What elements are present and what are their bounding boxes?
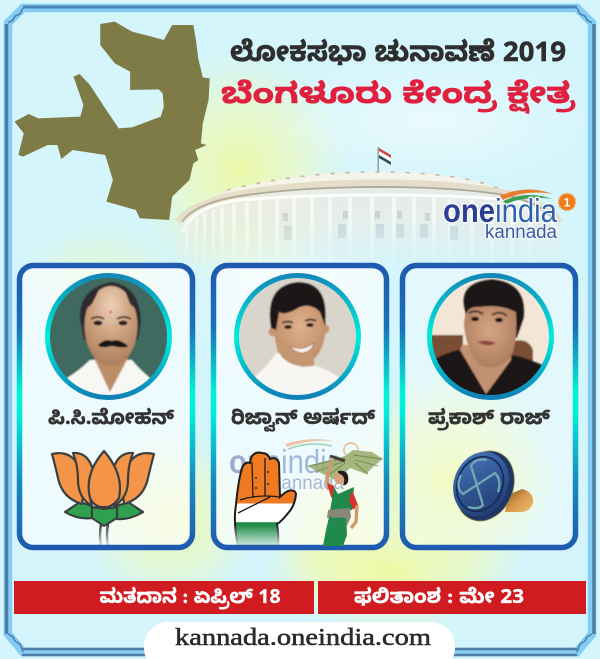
date bar: polling [14,581,314,614]
panel: candidate 2 [214,266,386,548]
portrait 3 [427,273,554,400]
panel: candidate 1 [20,266,192,548]
panel: candidate 3 [402,266,576,548]
parliament building [178,147,560,264]
name 2: ರಿಜ್ವಾನ್ ಅರ್ಷದ್ [231,407,375,435]
title [221,38,575,119]
logo: oneindia kannada [443,189,576,243]
website pill [144,622,455,659]
date bar: result: ಫಲಿತಾಂಶ : ಮೇ 23 [354,586,524,614]
icon: hand [235,453,296,546]
watermark logo: oneindia [229,443,344,480]
logo sub word: kannada [485,222,557,243]
watermark logo [229,439,358,494]
name 3: ಪ್ರಕಾಶ್ ರಾಜ್ [428,407,550,435]
title: ಲೋಕಸಭಾ ಚುನಾವಣೆ 2019 [230,38,566,77]
website pill: kannada.oneindia.com [175,625,431,651]
logo badge: 1 [564,196,571,210]
subtitle: ಬೆಂಗಳೂರು ಕೇಂದ್ರ ಕ್ಷೇತ್ರ [221,79,575,119]
date bar: result [318,581,586,614]
portrait 2 [234,273,361,400]
logo wordmark: oneindia [443,192,558,229]
watermark logo: kannada [272,473,344,494]
map of constituency [15,22,210,220]
name 1: ಪಿ.ಸಿ.ಮೋಹನ್ [48,407,174,435]
icon: lotus [52,451,154,546]
portrait 1 [45,273,172,400]
date bar: polling: ಮತದಾನ : ಏಪ್ರಿಲ್ 18 [100,586,280,614]
icon: woman with paddy [307,450,383,546]
icon: ballot stamp [444,442,533,530]
